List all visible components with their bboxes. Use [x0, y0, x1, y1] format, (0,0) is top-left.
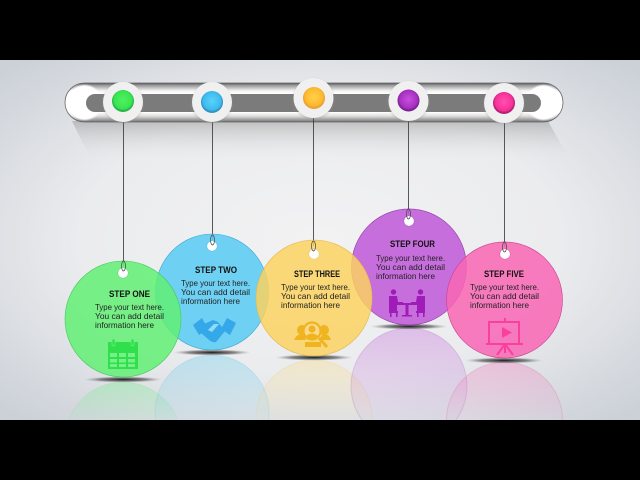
icon: calendar [108, 339, 138, 369]
hooks [122, 209, 506, 271]
body text: Type your text here. [95, 302, 164, 312]
floor shadows [84, 324, 543, 382]
panel: step four [351, 209, 467, 325]
body text: Type your text here. [281, 282, 350, 292]
body text: Type your text here. [470, 282, 539, 292]
body text: You can add detail [281, 291, 350, 301]
knob: step three [294, 78, 334, 119]
body text: You can add detail [376, 262, 445, 272]
panel: step two [156, 234, 268, 350]
timeline bar [65, 83, 563, 122]
body text: You can add detail [181, 287, 250, 297]
reflections [65, 328, 562, 480]
body text: You can add detail [470, 291, 539, 301]
panel: step three [256, 240, 372, 356]
knob: step one [103, 82, 143, 123]
heading: STEP FOUR [390, 239, 435, 249]
heading: STEP FIVE [484, 269, 524, 279]
panel: step five [446, 242, 562, 358]
body text: information here [376, 271, 435, 281]
icon: meeting at table [389, 289, 425, 317]
body text: Type your text here. [181, 278, 250, 288]
knob: step two [192, 82, 232, 123]
body text: information here [470, 300, 529, 310]
black letterbox top [0, 0, 640, 60]
background panel [0, 60, 640, 420]
heading: STEP TWO [195, 265, 237, 275]
knob: step five [484, 83, 524, 124]
knob: step four [388, 81, 428, 122]
body text: You can add detail [95, 311, 164, 321]
icon: presentation board [486, 318, 523, 355]
body text: information here [181, 296, 240, 306]
body text: information here [95, 320, 154, 330]
panel: step one [65, 261, 181, 377]
hanging strings [124, 118, 504, 266]
icon: handshake [193, 318, 236, 342]
heading: STEP ONE [109, 289, 150, 299]
black letterbox bottom [0, 420, 640, 480]
bar cast shadow [72, 121, 570, 160]
icon: people search [294, 322, 331, 347]
heading: STEP THREE [294, 269, 340, 279]
body text: information here [281, 300, 340, 310]
body text: Type your text here. [376, 253, 445, 263]
